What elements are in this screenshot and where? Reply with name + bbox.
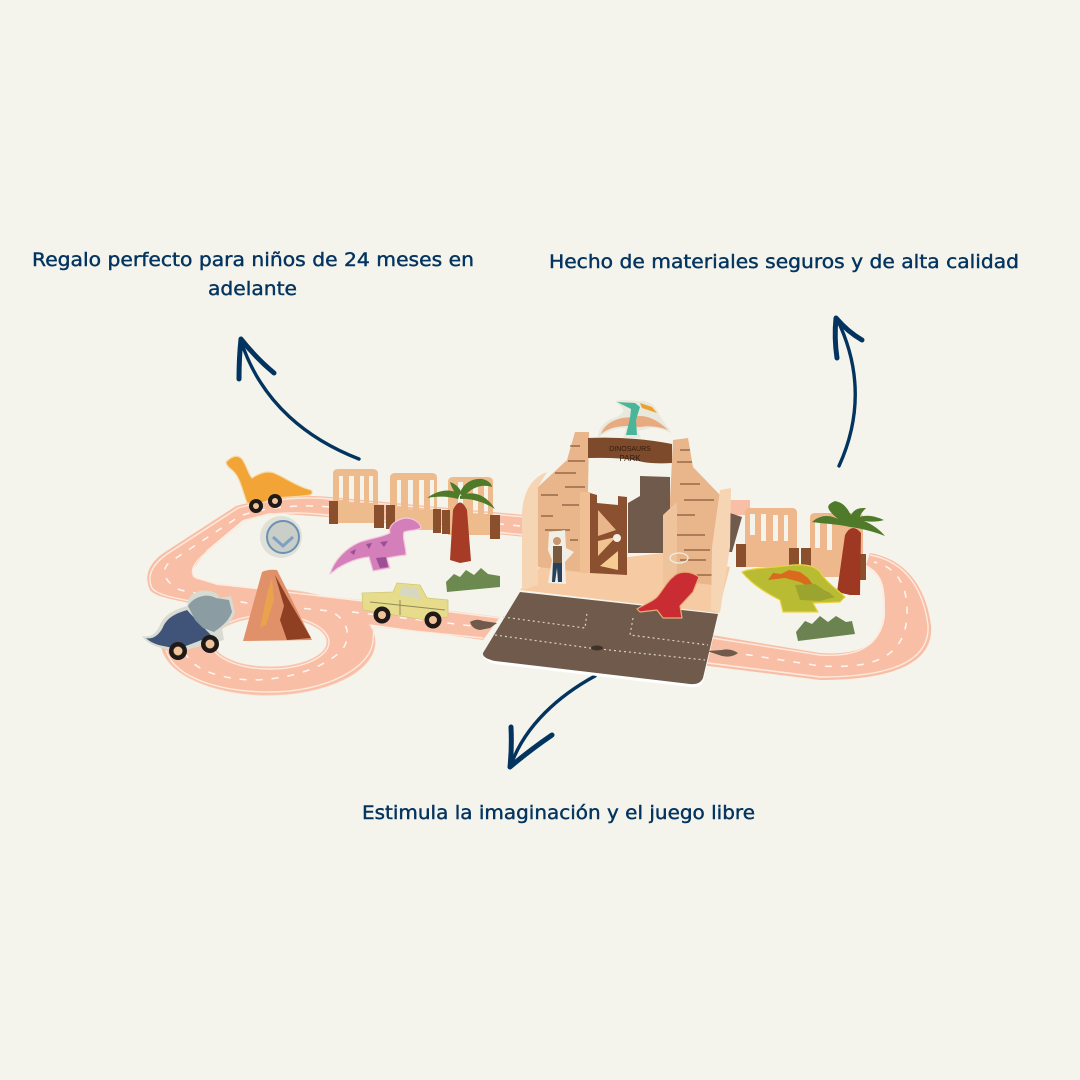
dinosaur: pink parasaurolophus	[330, 518, 421, 574]
icon: round wooden token	[260, 516, 302, 558]
sign: PARK	[619, 454, 641, 463]
fold-out board with road print	[483, 592, 718, 687]
arrow: to imagination text	[510, 676, 595, 767]
fences: left	[329, 469, 500, 539]
arrow: to gift text	[239, 339, 359, 459]
floor	[520, 553, 730, 613]
dinosaur: blue triceratops on wheels	[142, 591, 235, 660]
text: safe quality materials: Hecho de materiales seguros y de alta calidad	[549, 251, 1019, 273]
product: wooden dinosaur park toy set	[142, 400, 931, 695]
pterodactyl	[598, 400, 672, 438]
dinosaur: orange brachiosaurus on wheels	[226, 456, 312, 513]
park ranger figure	[548, 530, 574, 584]
toy car: yellow pickup	[362, 583, 448, 628]
palm tree: left	[427, 479, 495, 563]
volcano	[243, 570, 312, 641]
dinosaur: red t-rex	[637, 572, 699, 618]
sign	[588, 438, 672, 463]
left wall	[538, 432, 589, 572]
text: gift for 24 months and up	[32, 249, 474, 300]
dinosaur: green stegosaurus	[742, 565, 845, 612]
road: left figure-eight track	[147, 496, 525, 695]
bush: left	[446, 568, 500, 592]
rope loop	[670, 553, 688, 563]
sign: DINOSAURS	[609, 446, 651, 453]
road: right track	[700, 553, 931, 680]
arrow: to materials text	[835, 318, 862, 466]
text: imagination and free play: Estimula la imaginación y el juego libre	[362, 802, 755, 824]
fences: right	[736, 508, 866, 580]
road segment behind gate	[730, 500, 750, 515]
back board	[628, 476, 742, 553]
text: gift for 24 months and up: Regalo perfecto para niños de 24 meses en	[32, 249, 474, 271]
gate: dinosaur park entrance	[470, 400, 742, 687]
text: gift for 24 months and up: adelante	[208, 278, 297, 300]
keyholes on road	[470, 620, 497, 630]
door	[580, 492, 627, 575]
bush: right	[796, 616, 855, 641]
right wall	[670, 438, 720, 585]
palm tree: right	[812, 501, 885, 595]
